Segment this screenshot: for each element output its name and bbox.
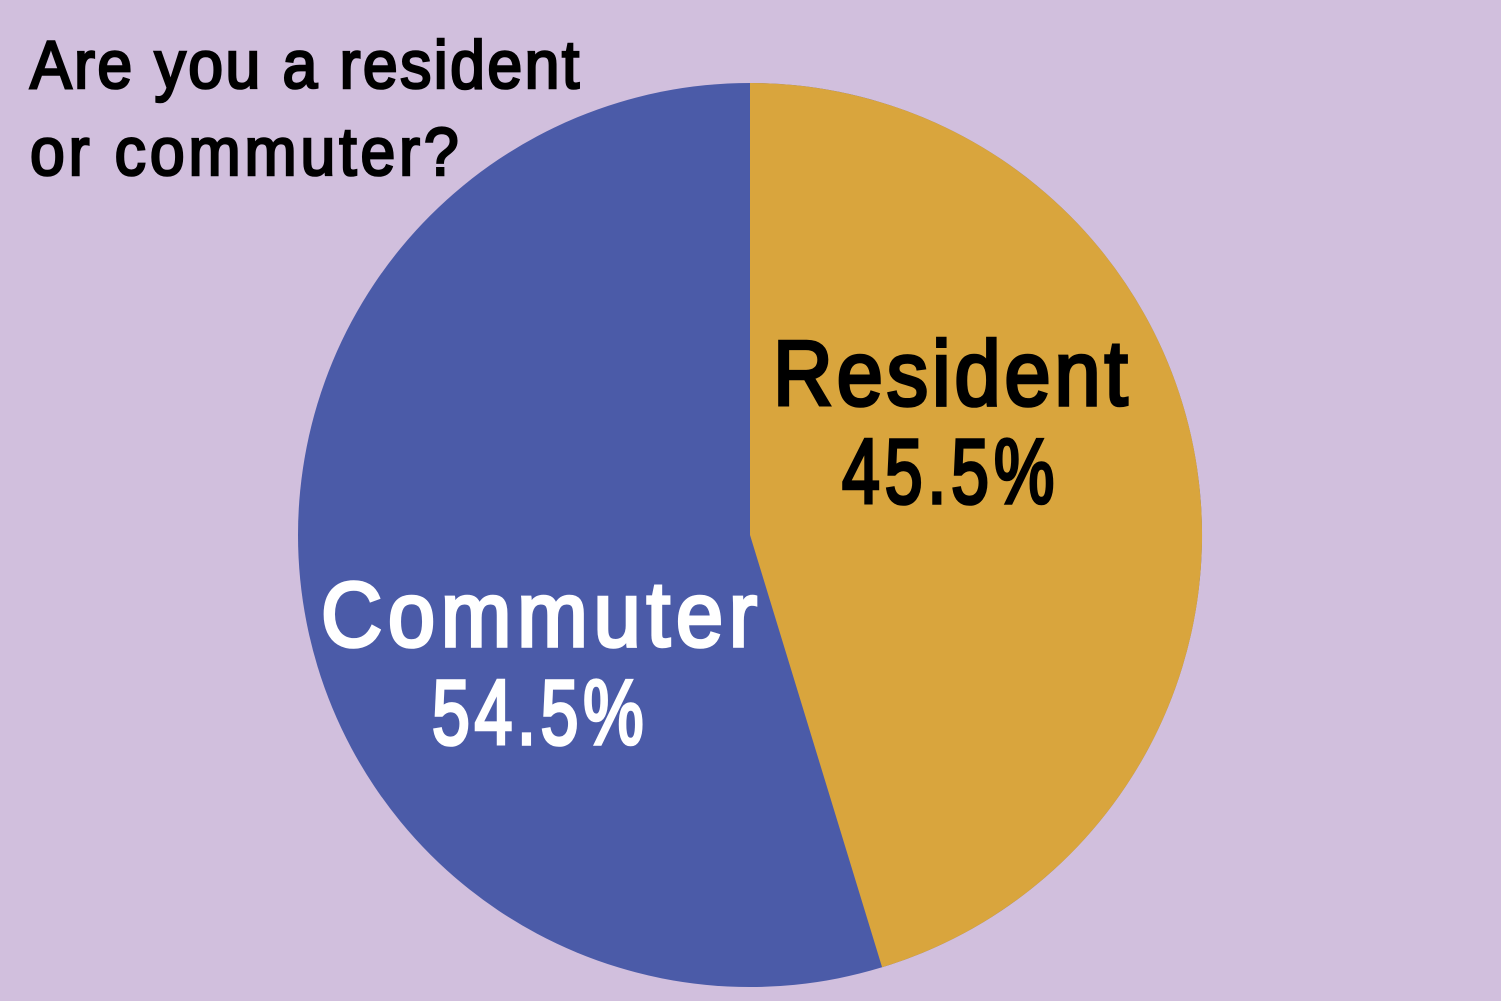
title: Are you a resident (30, 27, 579, 103)
slice: resident (750, 83, 1202, 967)
title: or commuter? (30, 114, 459, 190)
label: resident: 45.5% (842, 421, 1054, 523)
label: resident: Resident (773, 322, 1128, 425)
pie chart (298, 83, 1202, 987)
label: resident (773, 322, 1128, 523)
title (30, 27, 579, 190)
label: commuter: Commuter (321, 563, 757, 666)
slice: commuter (298, 83, 1202, 987)
label: commuter (321, 563, 757, 764)
label: commuter: 54.5% (432, 662, 644, 764)
